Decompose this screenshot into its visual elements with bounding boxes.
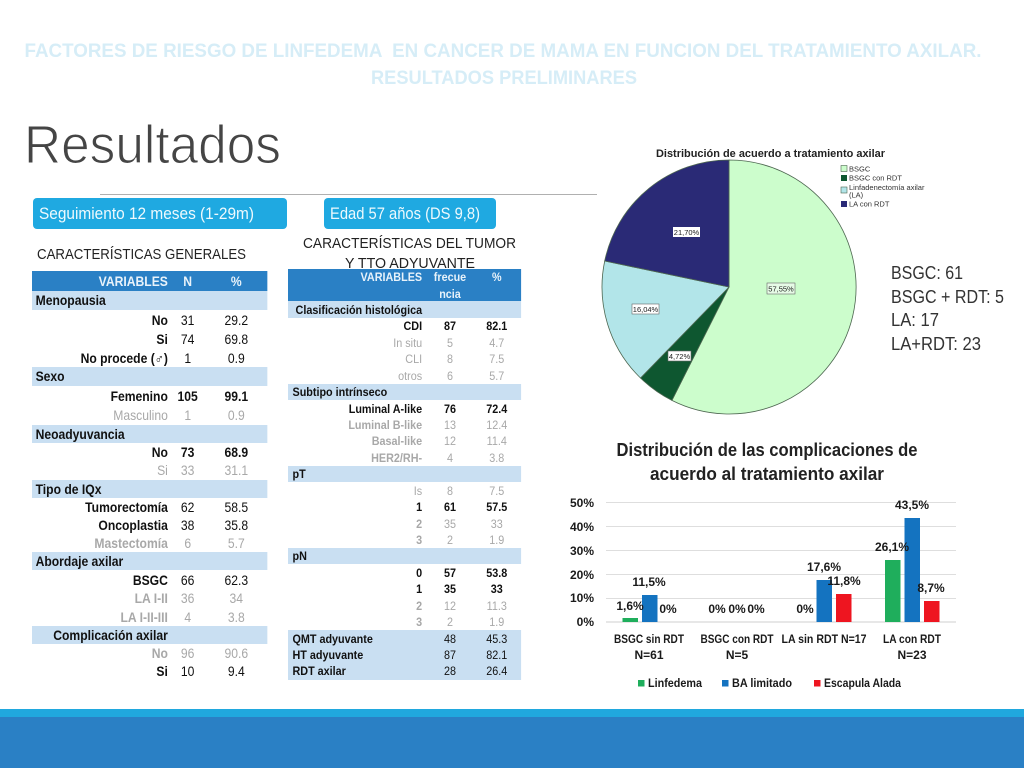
section: Sexo (32, 367, 267, 423)
badge: seguimiento: Seguimiento 12 meses (1-29m) (39, 205, 254, 223)
section: pT: 61 (444, 502, 457, 514)
pie slice labels: 57,55% (768, 284, 794, 294)
section: pT: 8 (447, 486, 453, 498)
section: pN: 33 (491, 584, 503, 596)
section: Menopausia: Si (156, 331, 168, 347)
category labels: N=23 (897, 648, 927, 662)
text block: número de pacientes por grupo: LA: 17 (891, 310, 939, 330)
section: tratamiento adyuvante: RDT axilar (293, 666, 346, 678)
section: Tipo de IQx: Mastectomía (94, 535, 169, 551)
bar chart: distribución de las complicaciones (570, 440, 956, 690)
section: Sexo: Femenino (111, 388, 168, 404)
section: tratamiento adyuvante: 48 (444, 634, 456, 646)
category labels: N=5 (726, 648, 748, 662)
section: Menopausia: 0.9 (228, 350, 245, 366)
section: pN: 57 (444, 568, 456, 580)
section: Tipo de IQx: 58.5 (224, 499, 248, 515)
section: Sexo: 1 (184, 407, 191, 423)
section: Clasificación histológica: 4.7 (489, 338, 504, 350)
section: pT (288, 466, 521, 547)
heading: características del tumor: CARACTERÍSTICAS DEL TUMOR (303, 235, 516, 252)
y axis labels: 10% (570, 591, 594, 605)
section: pT: 2 (416, 519, 422, 531)
section: Neoadyuvancia: Neoadyuvancia (36, 426, 125, 442)
data labels: 0% (728, 602, 746, 616)
section: Clasificación histológica: 8 (447, 354, 453, 366)
section: pT: Is (414, 486, 422, 498)
section: Subtipo intrínseco: Luminal A-like (349, 404, 422, 416)
section: Clasificación histológica: 7.5 (489, 354, 504, 366)
badge: seguimiento (33, 198, 287, 229)
section: Menopausia: No procede (♂) (81, 350, 168, 366)
y axis labels: 50% (570, 496, 594, 510)
section: Clasificación histológica (288, 301, 521, 383)
bars (622, 518, 940, 622)
badge: edad (324, 198, 496, 229)
table header (32, 271, 267, 291)
section: Neoadyuvancia: 73 (181, 444, 194, 460)
section: tratamiento adyuvante: 45.3 (486, 634, 507, 646)
section: Abordaje axilar (32, 552, 267, 625)
section: tratamiento adyuvante (288, 630, 521, 680)
y axis labels: 20% (570, 568, 594, 582)
section: pN: 3 (416, 617, 422, 629)
y axis labels: 30% (570, 544, 594, 558)
heading: características generales: CARACTERÍSTICAS GENERALES (37, 246, 246, 263)
section: pN: 0 (416, 568, 422, 580)
badge: edad: Edad 57 años (DS 9,8) (330, 205, 480, 223)
table header: frecue (434, 272, 466, 284)
data labels: 0% (796, 602, 814, 616)
section: Neoadyuvancia: 33 (181, 462, 194, 478)
data labels: 0% (659, 602, 677, 616)
section: Subtipo intrínseco: Luminal B-like (348, 420, 422, 432)
section: pT: 2 (447, 535, 453, 547)
text block: número de pacientes por grupo: BSGC: 61 (891, 263, 963, 283)
section: Subtipo intrínseco: 11.4 (487, 436, 508, 448)
section: Menopausia (32, 291, 267, 366)
category labels: BSGC sin RDT (614, 632, 685, 646)
data labels: 8,7% (917, 581, 945, 595)
section: tratamiento adyuvante: 26.4 (486, 666, 508, 678)
section: Sexo: 0.9 (228, 407, 245, 423)
bar chart legend: BA limitado (732, 676, 792, 690)
heading: características del tumor (303, 235, 516, 272)
table header: % (231, 273, 242, 289)
section: Complicación axilar: Si (156, 663, 168, 679)
text block: número de pacientes por grupo: BSGC + RDT: 5 (891, 287, 1004, 307)
section: Tipo de IQx: Oncoplastia (98, 517, 169, 533)
section: Neoadyuvancia: 31.1 (224, 462, 248, 478)
data labels: 11,8% (827, 574, 861, 588)
section: Complicación axilar: 96 (181, 645, 194, 661)
section: pN: 12 (444, 601, 456, 613)
section: tratamiento adyuvante: 82.1 (486, 650, 507, 662)
section: pT: 33 (491, 519, 503, 531)
section: Abordaje axilar: Abordaje axilar (36, 553, 123, 569)
bar chart legend: Escapula Alada (824, 676, 901, 690)
pie legend: BSGC (849, 164, 871, 174)
section: Complicación axilar: 90.6 (224, 645, 248, 661)
section: Tipo de IQx: Tipo de IQx (36, 481, 102, 497)
bar chart title: acuerdo al tratamiento axilar (650, 464, 884, 484)
pie legend: (LA) (849, 190, 864, 200)
section: Clasificación histológica: otros (398, 371, 422, 383)
text block: número de pacientes por grupo: LA+RDT: 23 (891, 334, 981, 354)
section: Subtipo intrínseco: 12.4 (486, 420, 508, 432)
section: Subtipo intrínseco: 72.4 (486, 404, 508, 416)
section: pN: 35 (444, 584, 457, 596)
footer band (0, 709, 1024, 768)
section: Subtipo intrínseco: 12 (444, 436, 456, 448)
section: Clasificación histológica: In situ (393, 338, 422, 350)
pie legend (841, 164, 925, 208)
data labels: 0% (747, 602, 765, 616)
table header: % (492, 272, 502, 284)
section: Subtipo intrínseco: 13 (444, 420, 456, 432)
section: Menopausia: Menopausia (36, 292, 107, 308)
section: pT: 3 (416, 535, 422, 547)
pie slice labels: 16,04% (633, 305, 659, 314)
section: pT: 35 (444, 519, 456, 531)
table header: ncia (439, 289, 461, 301)
section: Sexo: Masculino (113, 407, 168, 423)
section: Menopausia: 29.2 (224, 312, 248, 328)
section: Tipo de IQx: 5.7 (228, 535, 245, 551)
section: pN (288, 548, 521, 629)
section: Subtipo intrínseco: Subtipo intrínseco (293, 387, 387, 399)
section: tratamiento adyuvante: 28 (444, 666, 456, 678)
section: Tipo de IQx: 38 (181, 517, 194, 533)
section: Abordaje axilar: 36 (181, 590, 194, 606)
category labels: LA sin RDT N=17 (782, 632, 867, 646)
section: Neoadyuvancia: 68.9 (224, 444, 248, 460)
section: Complicación axilar (32, 626, 267, 679)
data labels: 17,6% (807, 560, 841, 574)
category labels: N=61 (634, 648, 664, 662)
pie title: Distribución de acuerdo a tratamiento axilar (656, 148, 886, 160)
section: Menopausia: 31 (181, 312, 194, 328)
section: Subtipo intrínseco: 76 (444, 404, 456, 416)
title: study name: FACTORES DE RIESGO DE LINFEDEMA EN CANCER DE MAMA EN FUNCION DEL TRATAMIENTO AXILAR. (24, 41, 982, 62)
section: Abordaje axilar: 66 (181, 572, 194, 588)
pie slice labels: 4,72% (669, 352, 690, 361)
section: Neoadyuvancia (32, 425, 267, 478)
section: Menopausia: 69.8 (224, 331, 248, 347)
section: pN: 1 (416, 584, 423, 596)
section: pT: pT (293, 469, 306, 481)
title: study name: RESULTADOS PRELIMINARES (371, 68, 637, 89)
section: Tipo de IQx (32, 480, 267, 551)
section: Tipo de IQx: 6 (184, 535, 191, 551)
heading: características del tumor: Y TTO ADYUVANTE (345, 255, 475, 272)
pie slice labels (632, 227, 795, 361)
section: Menopausia: 1 (184, 350, 191, 366)
table header (288, 269, 521, 301)
section: pN: 53.8 (486, 568, 507, 580)
bar chart legend (638, 676, 901, 690)
section: Sexo: 99.1 (224, 388, 248, 404)
table: características generales (32, 271, 267, 679)
data labels (616, 498, 945, 616)
title: study name (24, 41, 982, 89)
section: Abordaje axilar: BSGC (133, 572, 168, 588)
category labels: LA con RDT (883, 632, 942, 646)
section: Complicación axilar: 9.4 (228, 663, 245, 679)
section: Abordaje axilar: 4 (184, 609, 191, 625)
table: características del tumor (288, 269, 521, 680)
y axis labels (570, 496, 594, 629)
section: Clasificación histológica: CLI (405, 354, 422, 366)
section: tratamiento adyuvante: 87 (444, 650, 456, 662)
category labels: BSGC con RDT (700, 632, 774, 646)
section: pN: pN (293, 551, 307, 563)
section: Clasificación histológica: 82.1 (486, 321, 508, 333)
section: Subtipo intrínseco: 4 (447, 453, 454, 465)
section: pN: 2 (447, 617, 453, 629)
section: Abordaje axilar: LA I-II (135, 590, 168, 606)
section: Complicación axilar: No (152, 645, 168, 661)
data labels: 0% (708, 602, 726, 616)
section: pT: 1.9 (489, 535, 504, 547)
section: Clasificación histológica: 87 (444, 321, 456, 333)
section: Neoadyuvancia: Si (157, 462, 168, 478)
bar chart legend: Linfedema (648, 676, 702, 690)
section: Abordaje axilar: 34 (230, 590, 243, 606)
pie legend: LA con RDT (849, 200, 890, 208)
section: Tipo de IQx: Tumorectomía (85, 499, 169, 515)
section: Neoadyuvancia: No (152, 444, 168, 460)
section: Complicación axilar: 10 (181, 663, 194, 679)
section: Tipo de IQx: 35.8 (224, 517, 248, 533)
section: Complicación axilar: Complicación axilar (53, 627, 168, 643)
pie legend: Linfadenectomía axilar (849, 183, 925, 192)
section: Clasificación histológica: 6 (447, 371, 453, 383)
table header: VARIABLES (99, 273, 168, 289)
section: pN: 11.3 (487, 601, 507, 613)
y axis labels: 40% (570, 520, 594, 534)
section: pN: 1.9 (489, 617, 504, 629)
section: pN: 2 (416, 601, 422, 613)
y axis labels: 0% (577, 615, 594, 629)
section: Sexo: Sexo (36, 368, 65, 384)
data labels: 1,6% (616, 599, 644, 613)
table header: VARIABLES (361, 272, 422, 284)
section: Sexo: 105 (178, 388, 198, 404)
section: Tipo de IQx: 62 (181, 499, 194, 515)
section: Subtipo intrínseco: Basal-like (372, 436, 422, 448)
section: Abordaje axilar: 3.8 (228, 609, 245, 625)
pie slice labels: 21,70% (674, 228, 700, 237)
pie slices (602, 160, 856, 414)
section: pT: 7.5 (489, 486, 504, 498)
section: Abordaje axilar: LA I-II-III (120, 609, 168, 625)
section: tratamiento adyuvante: HT adyuvante (293, 650, 363, 662)
section: Menopausia: 74 (181, 331, 194, 347)
section: pT: 1 (416, 502, 423, 514)
section: Subtipo intrínseco (288, 384, 521, 465)
section: Subtipo intrínseco: 3.8 (489, 453, 504, 465)
data labels: 43,5% (895, 498, 929, 512)
heading: Resultados: Resultados (24, 115, 281, 175)
data labels: 11,5% (632, 575, 666, 589)
bar chart title: Distribución de las complicaciones de (616, 440, 918, 460)
section: pT: 57.5 (486, 502, 508, 514)
section: Clasificación histológica: 5 (447, 338, 453, 350)
section: Clasificación histológica: Clasificación histológica (296, 305, 423, 317)
section: Clasificación histológica: CDI (404, 321, 422, 333)
bar chart title (616, 440, 918, 484)
section: tratamiento adyuvante: QMT adyuvante (293, 634, 373, 646)
section: Subtipo intrínseco: HER2/RH- (371, 453, 422, 465)
section: Clasificación histológica: 5.7 (489, 371, 504, 383)
table header: N (183, 273, 192, 289)
text block: número de pacientes por grupo (891, 263, 1004, 354)
pie chart: distribución de acuerdo a tratamiento axilar (602, 148, 925, 414)
data labels: 26,1% (875, 540, 909, 554)
section: Menopausia: No (152, 312, 168, 328)
category labels (614, 632, 942, 662)
section: Abordaje axilar: 62.3 (224, 572, 248, 588)
pie legend: BSGC con RDT (849, 174, 902, 182)
